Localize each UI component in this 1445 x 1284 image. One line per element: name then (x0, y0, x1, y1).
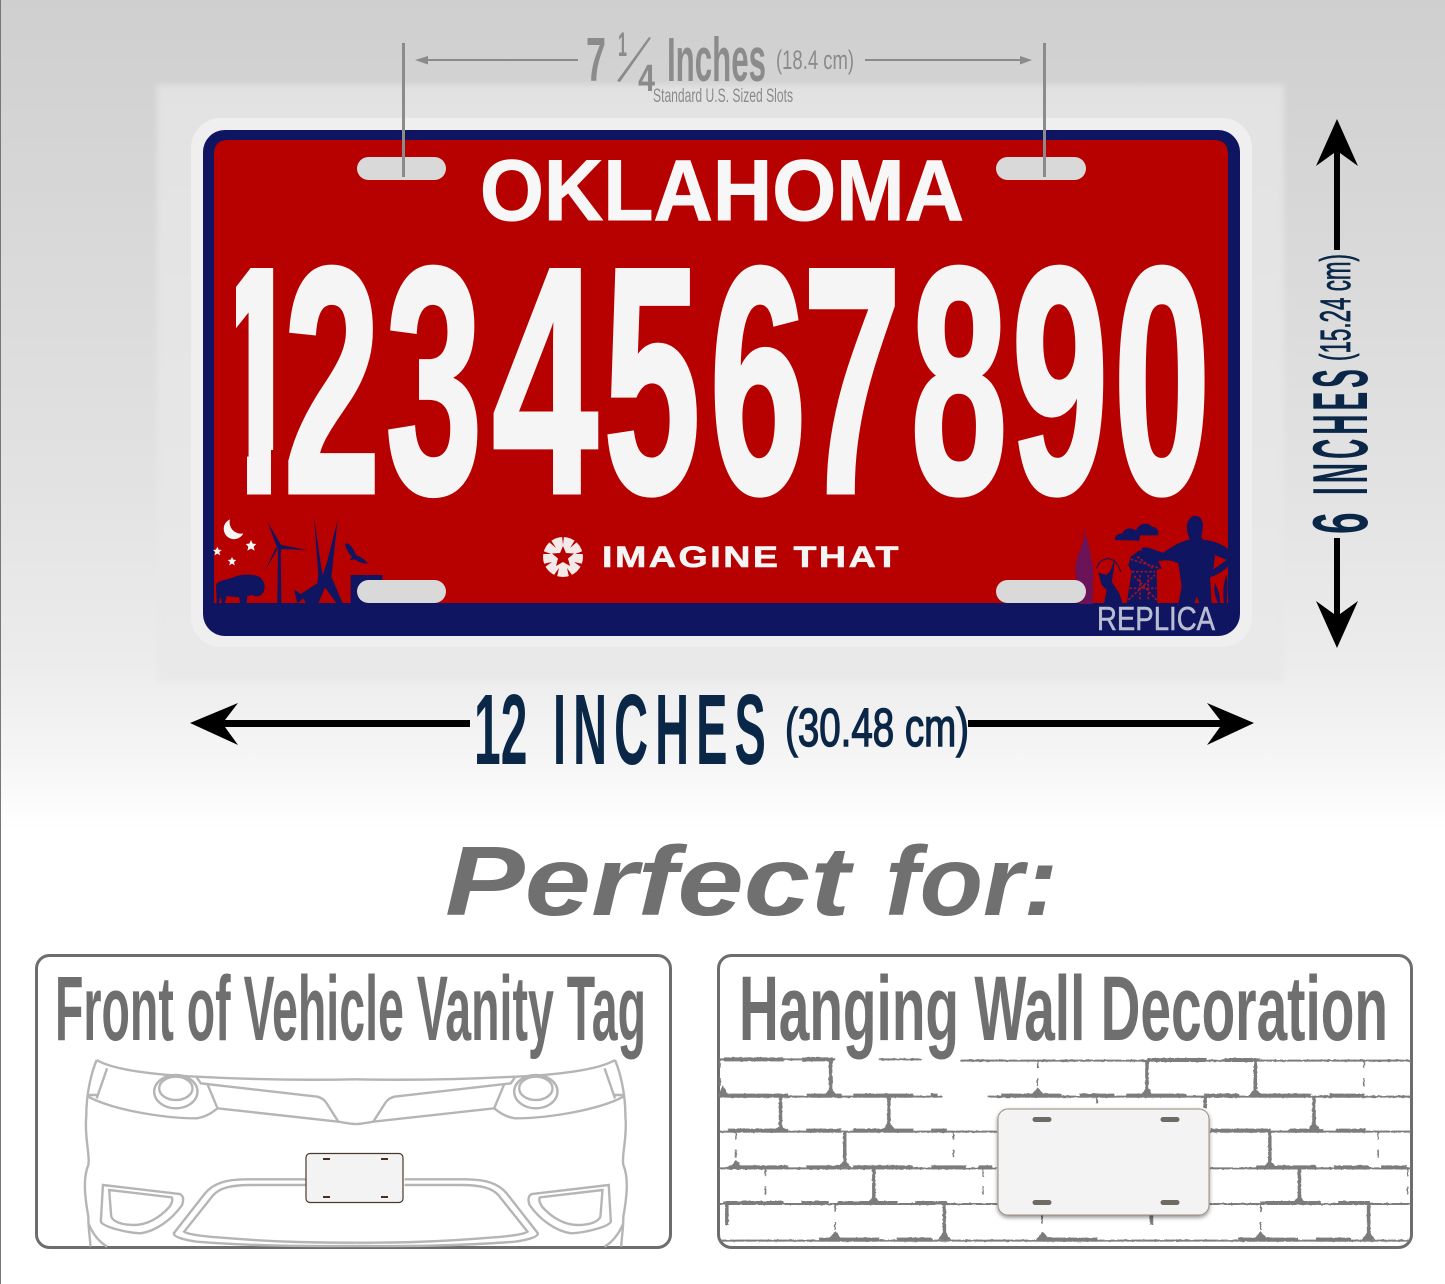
icon: state star logo (542, 536, 584, 577)
license plate (191, 118, 1252, 647)
icon: capitol tower (1075, 524, 1093, 604)
dimension text: 7 (586, 26, 606, 95)
dimension text: Standard U.S. Sized Slots (653, 86, 793, 107)
plate navy frame (203, 130, 1240, 636)
icon: stars (213, 540, 256, 565)
plate number: 2 (284, 201, 380, 560)
dimension text: Inches (667, 26, 766, 95)
icon: moon (224, 519, 243, 539)
brick wall (718, 1058, 1411, 1241)
plate red field (214, 140, 1228, 603)
arrow: left (190, 703, 470, 745)
panel: front of vehicle (36, 956, 670, 1248)
plate number: 8 (911, 201, 1007, 560)
width dimension (190, 673, 1254, 786)
plate number (212, 201, 1210, 561)
icon: sculpture (294, 517, 343, 603)
heading: perfect for (445, 826, 1058, 936)
small blank plate (306, 1154, 403, 1202)
plate number: 4 (492, 202, 599, 561)
width label: 12 (474, 673, 527, 786)
arrow: right (865, 56, 1032, 64)
mounting slots (357, 157, 1086, 603)
plate white border (191, 118, 1252, 647)
dimension text (586, 26, 854, 107)
icon: bison (216, 575, 265, 603)
plate number: 9 (1012, 201, 1108, 560)
icon: statue (1098, 558, 1123, 604)
icon: eagle (345, 544, 368, 563)
replica mark: REPLICA (1097, 600, 1215, 637)
panel title: Front of Vehicle Vanity Tag (55, 958, 646, 1060)
dimension text: 4 (638, 58, 655, 100)
heading: perfect for: for: (885, 826, 1058, 936)
slot spacing dimension (402, 26, 1046, 177)
car front illustration (85, 1060, 627, 1247)
plate number: 1 (212, 201, 302, 560)
icon: wheat (1214, 575, 1228, 603)
icon: wind turbine (264, 522, 307, 603)
height label: INCHES (1298, 365, 1384, 495)
plate number: 3 (386, 201, 482, 560)
height label: 6 (1297, 512, 1385, 534)
panel frame (36, 956, 670, 1248)
icon: man silhouette (1142, 516, 1229, 604)
state name: OKLAHOMA (480, 143, 964, 239)
slogan: IMAGINE THAT (602, 541, 901, 574)
width label: INCHES (553, 673, 773, 786)
plate number: 6 (710, 201, 806, 560)
dimension text: (18.4 cm) (776, 45, 854, 75)
heading: perfect for: Perfect (445, 826, 854, 936)
slot guide lines (402, 43, 1046, 177)
background (0, 0, 1445, 830)
plate backing panel (157, 85, 1284, 682)
width metric label: (30.48 cm) (785, 698, 969, 758)
panel frame (718, 956, 1412, 1248)
left silhouettes: moon, stars, bison, turbine, sculpture, eagle (213, 517, 382, 604)
icon: clouds (1115, 524, 1158, 541)
blank plate on wall (998, 1109, 1209, 1215)
arrow: right (968, 703, 1254, 745)
right silhouettes: tower, statue, derrick, man, clouds, wheat (1075, 516, 1229, 604)
plate number: 5 (604, 201, 700, 560)
dimension text: 1 (618, 26, 627, 64)
height dimension (1297, 119, 1385, 648)
arrow: down (1316, 538, 1358, 648)
plate number: 0 (1114, 201, 1210, 560)
height metric label: (15.24 cm) (1312, 254, 1360, 361)
panel: hanging wall decoration (718, 956, 1412, 1248)
arrow: left (415, 56, 578, 64)
plate number: 7 (803, 202, 901, 561)
icon: building (351, 575, 382, 604)
arrow: up (1316, 119, 1358, 250)
icon: oil derrick (1127, 550, 1162, 604)
